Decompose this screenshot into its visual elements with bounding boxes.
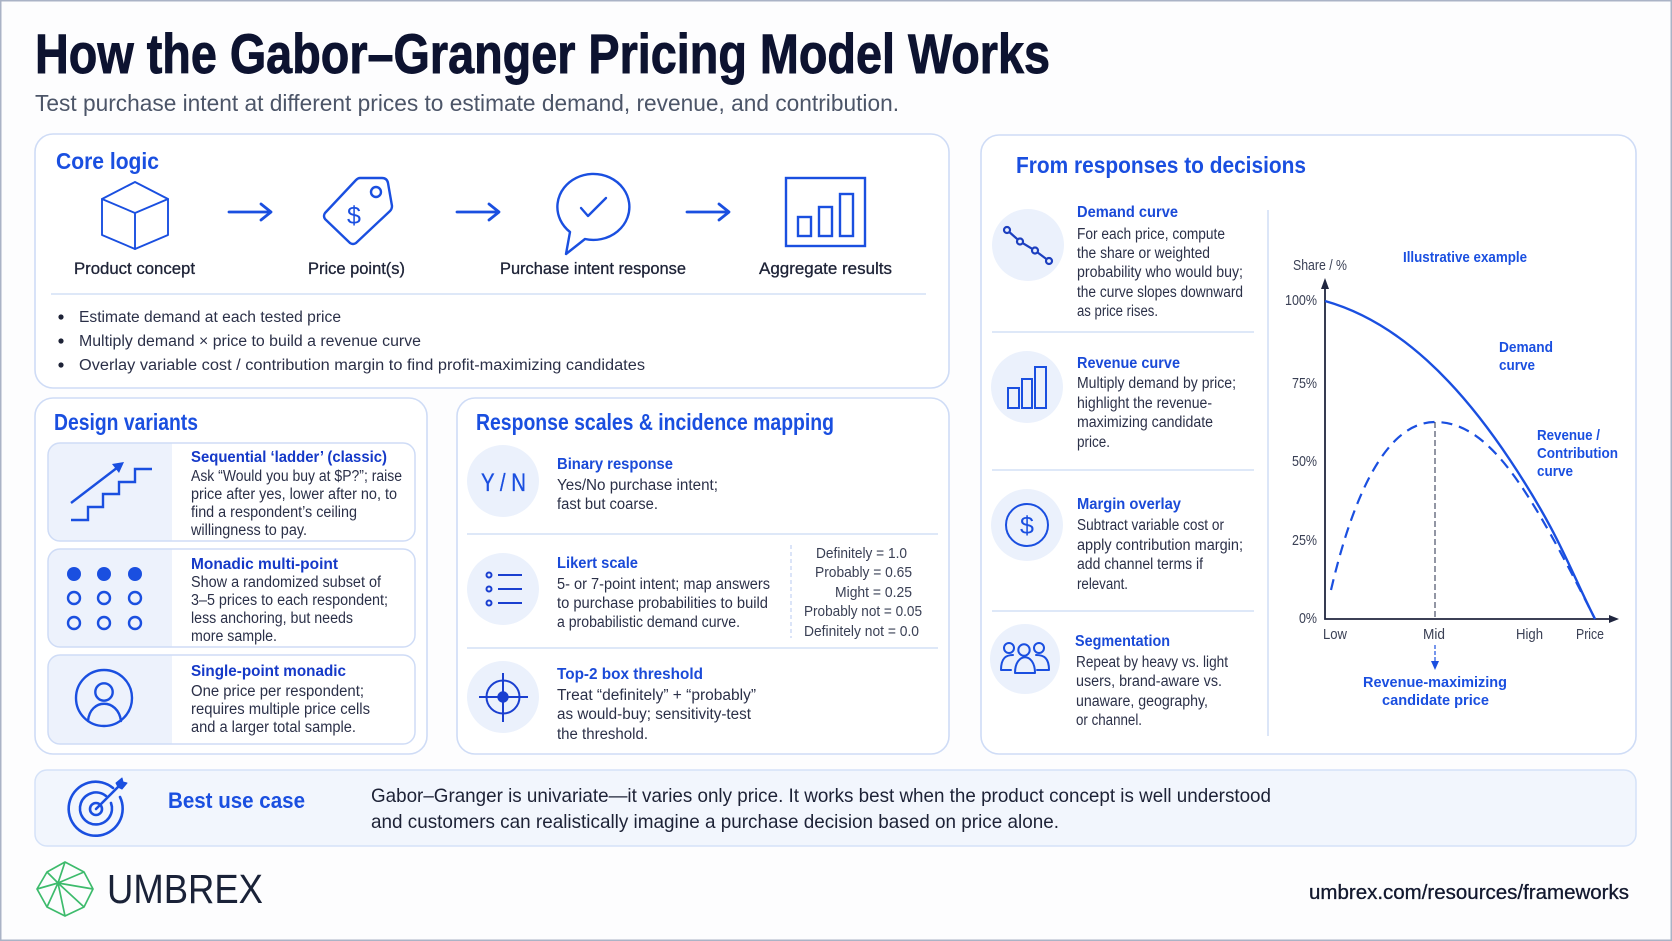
arrow: intent to results — [687, 204, 729, 220]
heading: core logic: Core logic — [56, 148, 159, 174]
logo: umbrex — [37, 862, 263, 916]
icon: price tag — [324, 178, 392, 244]
icon: Y / N: Y / N — [481, 469, 526, 497]
panel: core logic — [35, 134, 949, 388]
x axis labels: Price — [1576, 626, 1604, 643]
row: demand curve: For each price, compute — [1077, 226, 1225, 243]
card: monadic multi-point: Monadic multi-point — [191, 556, 339, 573]
row: binary response: Yes/No purchase intent; — [557, 477, 718, 494]
row: revenue curve: Multiply demand by price; — [1077, 375, 1236, 392]
axis titles: Illustrative example — [1403, 249, 1527, 266]
arrow: concept to price — [229, 204, 271, 220]
footer url: umbrex.com/resources/frameworks — [1309, 882, 1629, 904]
likert mapping values: Might = 0.25 — [835, 584, 912, 601]
icon: list — [486, 572, 522, 606]
callout: best use case — [35, 770, 1636, 846]
y axis labels — [1285, 292, 1317, 627]
row: demand curve: the share or weighted — [1077, 245, 1210, 262]
panel: response scales — [457, 398, 949, 754]
likert mapping values: Probably not = 0.05 — [804, 603, 922, 620]
row: demand curve: the curve slopes downward — [1077, 284, 1243, 301]
row: likert scale: Likert scale — [557, 555, 638, 572]
row: margin overlay: Subtract variable cost or — [1077, 517, 1224, 534]
card: sequential ladder: Sequential ‘ladder’ (classic) — [191, 449, 387, 466]
x axis labels — [1323, 626, 1604, 643]
icon: stairs and arrow — [71, 462, 152, 520]
likert mapping values: Definitely = 1.0 — [816, 545, 907, 562]
card: single-point monadic: Single-point monadic — [191, 663, 346, 680]
logo: umbrex: UMBREX — [107, 866, 263, 912]
best use case text — [371, 785, 1271, 833]
row: revenue curve: maximizing candidate — [1077, 414, 1213, 431]
axes — [1321, 278, 1619, 623]
row: segmentation: Repeat by heavy vs. light — [1076, 654, 1229, 671]
label: demand curve: curve — [1499, 357, 1535, 374]
card: monadic multi-point: less anchoring, but needs — [191, 610, 353, 627]
bullet list — [58, 309, 645, 374]
row: revenue curve — [991, 351, 1236, 451]
y axis labels: 0% — [1299, 610, 1317, 627]
icon: green polygon mark — [37, 862, 93, 916]
arrow: price to intent — [457, 204, 499, 220]
label: demand curve — [1499, 339, 1553, 374]
heading: from responses to decisions: From responses to decisions — [1016, 152, 1306, 178]
row: revenue curve: highlight the revenue- — [1077, 395, 1212, 412]
label: revenue curve: Revenue / — [1537, 427, 1601, 444]
bullet list: Overlay variable cost / contribution margin to find profit-maximizing candidates — [79, 357, 645, 374]
subtitle: Test purchase intent at different prices to estimate demand, revenue, and contribution. — [35, 90, 899, 116]
y axis labels: 75% — [1292, 375, 1317, 392]
panel: design variants — [35, 398, 427, 754]
icon: bar chart in frame — [786, 178, 865, 246]
step labels — [74, 259, 892, 278]
x axis labels: High — [1516, 626, 1543, 643]
best use case text: and customers can realistically imagine a purchase decision based on price alone. — [371, 811, 1059, 833]
callout: best use case: Best use case — [168, 788, 305, 813]
icon: price tag: $ — [347, 202, 361, 230]
icon: descending line — [1004, 227, 1052, 264]
icon: person in circle — [76, 670, 132, 726]
row: demand curve: probability who would buy; — [1077, 264, 1243, 281]
card: sequential ladder — [48, 443, 415, 541]
guide line at mid price — [1434, 422, 1436, 619]
row: segmentation: or channel. — [1076, 712, 1142, 729]
row: margin overlay: apply contribution margin; — [1077, 537, 1243, 554]
y axis labels: 50% — [1292, 453, 1317, 470]
row: binary response: Binary response — [557, 456, 673, 473]
card: sequential ladder: find a respondent’s ceiling — [191, 504, 357, 521]
card: single-point monadic: requires multiple price cells — [191, 701, 370, 718]
row: binary response — [467, 445, 718, 517]
title: How the Gabor–Granger Pricing Model Works — [35, 22, 1050, 85]
row: margin overlay: Margin overlay — [1077, 496, 1181, 513]
row: margin overlay — [991, 489, 1243, 593]
row: segmentation: Segmentation — [1075, 633, 1170, 650]
label: revenue curve: curve — [1537, 463, 1573, 480]
card: sequential ladder: Ask “Would you buy at $P?”; raise — [191, 468, 402, 485]
step labels: Price point(s) — [308, 259, 405, 278]
row: top-2 box — [467, 661, 756, 743]
row: revenue curve: Revenue curve — [1077, 355, 1180, 372]
chart: demand and revenue curves — [1285, 249, 1619, 709]
card: monadic multi-point — [48, 549, 415, 647]
revenue curve — [1331, 422, 1595, 619]
row: segmentation: users, brand-aware vs. — [1076, 673, 1222, 690]
icon: speech bubble with check — [557, 174, 629, 254]
row: demand curve: as price rises. — [1077, 303, 1158, 320]
row: likert scale: to purchase probabilities to build — [557, 595, 768, 612]
row: binary response: fast but coarse. — [557, 496, 658, 513]
bullet list: Estimate demand at each tested price — [79, 309, 341, 326]
row: top-2 box: Treat “definitely” + “probably” — [557, 687, 756, 704]
card: monadic multi-point: Show a randomized subset of — [191, 574, 382, 591]
card: monadic multi-point: 3–5 prices to each respondent; — [191, 592, 388, 609]
row: revenue curve: price. — [1077, 434, 1110, 451]
row: top-2 box: as would-buy; sensitivity-test — [557, 706, 752, 723]
row: margin overlay: add channel terms if — [1077, 556, 1204, 573]
icon: crosshair — [479, 673, 528, 722]
row: demand curve: Demand curve — [1077, 204, 1178, 221]
label: revenue curve — [1537, 427, 1618, 480]
likert mapping values — [804, 545, 922, 640]
label: revenue-maximizing price — [1363, 674, 1507, 709]
row: top-2 box: the threshold. — [557, 726, 648, 743]
heading: design variants: Design variants — [54, 409, 198, 435]
best use case text: Gabor–Granger is univariate—it varies only price. It works best when the product concept is well understood — [371, 785, 1271, 807]
row: top-2 box: Top-2 box threshold — [557, 666, 703, 683]
axis titles: Share / % — [1293, 257, 1347, 274]
card: sequential ladder: price after yes, lower after no, to — [191, 486, 397, 503]
y axis labels: 25% — [1292, 532, 1317, 549]
heading: response scales: Response scales & incidence mapping — [476, 409, 834, 435]
card: single-point monadic — [48, 655, 415, 744]
row: likert scale — [467, 553, 770, 631]
icon: dollar coin: $ — [1020, 512, 1034, 540]
row: segmentation: unaware, geography, — [1076, 693, 1208, 710]
step labels: Product concept — [74, 259, 195, 278]
bullet list: Multiply demand × price to build a revenue curve — [79, 333, 421, 350]
step labels: Aggregate results — [759, 259, 892, 278]
icon: three people — [1001, 643, 1049, 673]
icon: dollar coin — [1006, 504, 1048, 546]
y axis labels: 100% — [1285, 292, 1317, 309]
card: single-point monadic: and a larger total sample. — [191, 719, 356, 736]
card: single-point monadic: One price per respondent; — [191, 683, 364, 700]
label: revenue-maximizing price: candidate price — [1382, 692, 1489, 709]
row: likert scale: a probabilistic demand curve. — [557, 614, 740, 631]
row: segmentation — [990, 624, 1229, 729]
likert mapping values: Probably = 0.65 — [815, 564, 912, 581]
x axis labels: Mid — [1423, 626, 1445, 643]
card: monadic multi-point: more sample. — [191, 628, 277, 645]
label: demand curve: Demand — [1499, 339, 1553, 356]
row: margin overlay: relevant. — [1077, 576, 1128, 593]
step labels: Purchase intent response — [500, 259, 686, 278]
card: sequential ladder: willingness to pay. — [190, 522, 307, 539]
icon: bars — [1008, 367, 1046, 408]
label: revenue curve: Contribution — [1537, 445, 1618, 462]
icon: dot grid — [67, 567, 142, 629]
demand curve — [1325, 301, 1595, 619]
icon: product cube — [102, 182, 168, 249]
x axis labels: Low — [1323, 626, 1347, 643]
icon: target with arrow — [69, 778, 127, 836]
row: likert scale: 5- or 7-point intent; map answers — [557, 576, 770, 593]
row: demand curve — [992, 204, 1243, 320]
label: revenue-maximizing price: Revenue-maximizing — [1363, 674, 1507, 691]
likert mapping values: Definitely not = 0.0 — [804, 623, 919, 640]
axis titles — [1293, 249, 1527, 274]
arrow: to revenue-maximizing price — [1431, 645, 1439, 670]
panel: from responses to decisions — [981, 135, 1636, 754]
